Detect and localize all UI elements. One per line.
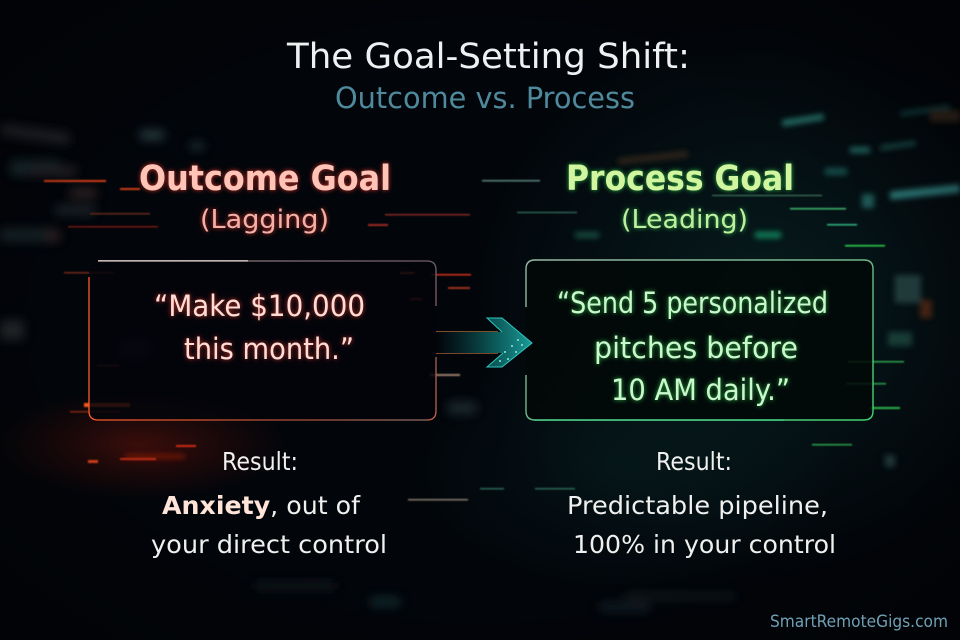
panel: outcome goal box <box>89 260 436 420</box>
result text: outcome goal: your direct control <box>151 530 387 559</box>
result text: process goal: Predictable pipeline, <box>567 491 828 520</box>
title: The Goal-Setting Shift: <box>286 37 690 77</box>
result text: process goal: 100% in your control <box>573 530 836 559</box>
quote: outcome goal: this month.” <box>184 332 354 366</box>
result text: process goal <box>567 447 836 559</box>
subtitle: Outcome vs. Process <box>335 81 635 115</box>
result text: outcome goal: Anxiety, out of <box>162 491 361 520</box>
quote: outcome goal: “Make $10,000 <box>154 289 365 323</box>
heading: process goal: Process Goal <box>566 159 794 199</box>
heading: process goal: (Leading) <box>621 205 748 235</box>
arrow: outcome to process <box>436 318 532 367</box>
quote: process goal <box>557 286 828 407</box>
quote: process goal: “Send 5 personalized <box>557 286 828 320</box>
quote: outcome goal <box>154 289 365 366</box>
heading: outcome goal: Outcome Goal <box>139 159 391 199</box>
result text: outcome goal: Result: <box>222 447 298 476</box>
quote: process goal: 10 AM daily.” <box>611 373 790 407</box>
heading: process goal <box>566 159 794 235</box>
result text: process goal: Result: <box>656 447 732 476</box>
heading: outcome goal: (Lagging) <box>200 205 329 235</box>
quote: process goal: pitches before <box>594 331 798 365</box>
heading: outcome goal <box>139 159 391 235</box>
panel: process goal box <box>526 260 873 421</box>
result text: outcome goal <box>151 447 387 559</box>
